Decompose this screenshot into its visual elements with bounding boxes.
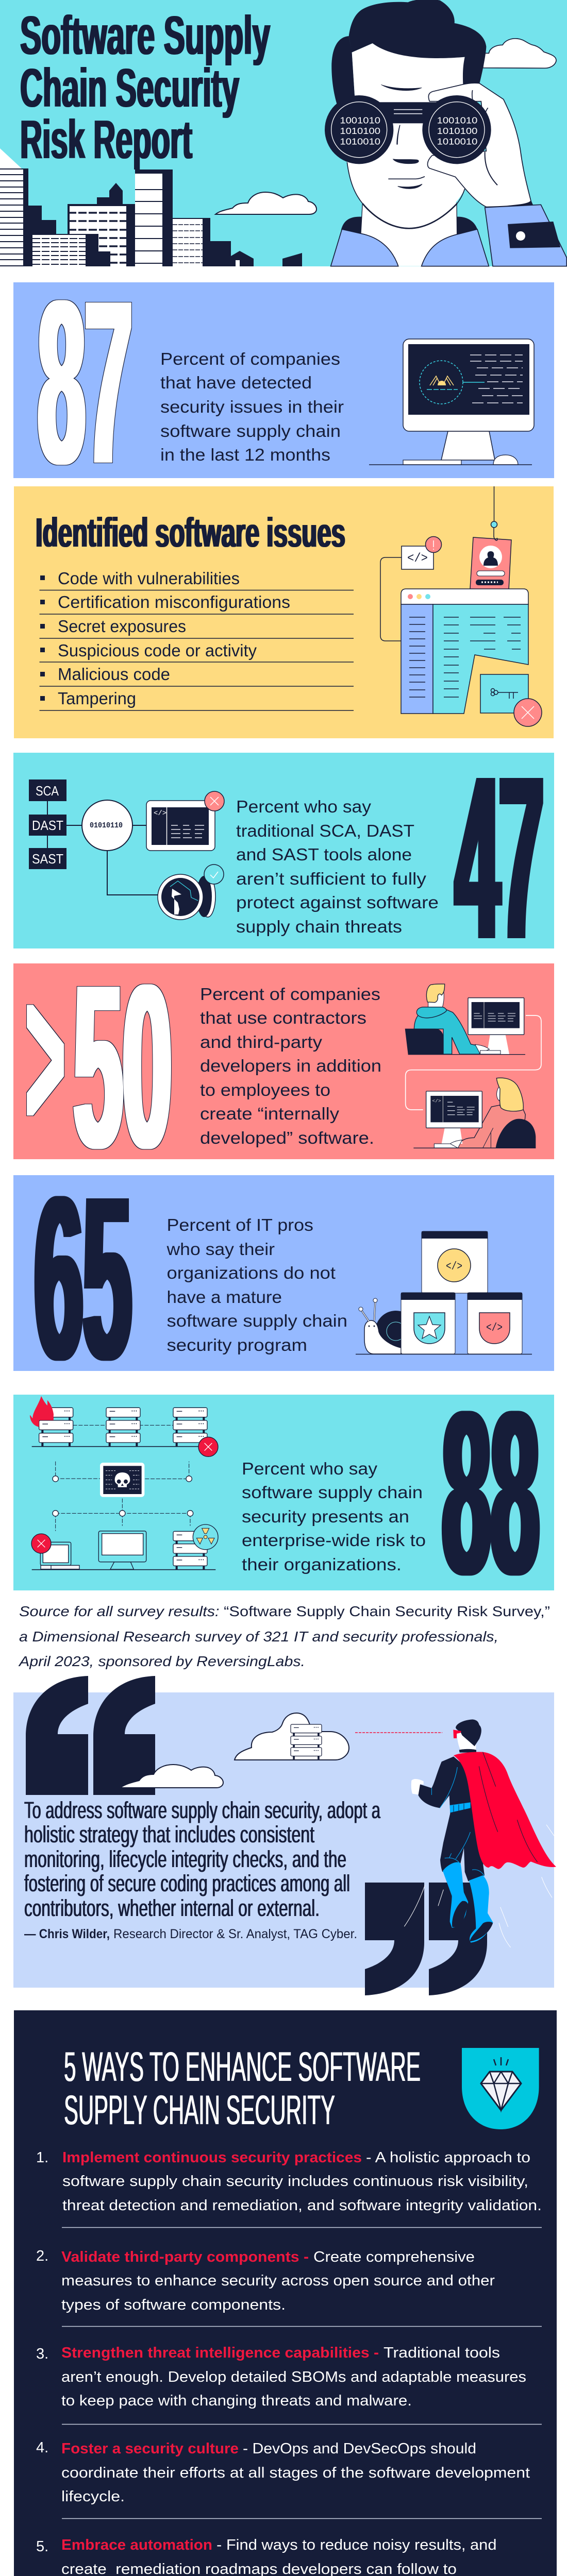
stat text: have a mature bbox=[167, 1287, 282, 1307]
network threat diagram bbox=[30, 1396, 218, 1570]
issues list: Tampering bbox=[58, 689, 136, 708]
stat text: software supply chain bbox=[160, 421, 341, 440]
man looking through binoculars: 1001010 bbox=[437, 115, 477, 125]
item 4: - DevOps and DevSecOps should bbox=[243, 2441, 476, 2457]
left box with star shield bbox=[401, 1293, 455, 1354]
source note: a Dimensional Research survey of 321 IT and security professionals, bbox=[19, 1629, 498, 1645]
stat text: software supply chain bbox=[242, 1483, 423, 1502]
attribution: — Chris Wilder, bbox=[24, 1927, 110, 1941]
quote text: contributors, whether internal or external. bbox=[24, 1895, 320, 1921]
tools diagram bbox=[29, 779, 224, 920]
stat text: supply chain threats bbox=[236, 917, 402, 936]
code window with X bbox=[146, 791, 224, 851]
item 3: aren’t enough. Develop detailed SBOMs and adaptable measures bbox=[61, 2369, 526, 2385]
title: Software Supply bbox=[20, 5, 270, 66]
stat text bbox=[242, 1459, 426, 1574]
stat text: and third-party bbox=[200, 1032, 323, 1052]
server racks bbox=[39, 1408, 207, 1446]
item 1: Implement continuous security practices bbox=[62, 2149, 362, 2166]
laptop with X bbox=[31, 1534, 79, 1569]
item 1: - A holistic approach to bbox=[366, 2149, 530, 2166]
man looking through binoculars: 1001010 bbox=[340, 115, 380, 125]
stat panel over 50 percent: 50 bbox=[74, 936, 172, 1196]
man looking through binoculars: 1010100 bbox=[437, 126, 477, 136]
heading bbox=[64, 2044, 421, 2133]
man looking through binoculars: 1010100 bbox=[340, 126, 380, 136]
stat text: Percent who say bbox=[242, 1459, 378, 1478]
label DAST: DAST bbox=[32, 818, 63, 833]
stat panel 65 percent: 65 bbox=[35, 1148, 131, 1408]
stat text: their organizations. bbox=[242, 1555, 402, 1574]
label SCA bbox=[29, 779, 66, 801]
stat panel 47 percent bbox=[13, 727, 554, 988]
skull screen bbox=[100, 1463, 144, 1497]
hacker coin with check bbox=[158, 865, 224, 920]
source note: Source for all survey results: “Software Supply Chain Security Risk Survey,” bbox=[19, 1603, 550, 1619]
big number >50: > bbox=[27, 942, 63, 1172]
stat text bbox=[166, 1215, 347, 1354]
item 4: 4. bbox=[36, 2439, 48, 2456]
stat text: Percent of companies bbox=[200, 985, 380, 1004]
stat text: software supply chain bbox=[167, 1311, 347, 1330]
item 5: Embrace automation bbox=[61, 2537, 212, 2553]
stat text: who say their bbox=[166, 1240, 275, 1259]
source note bbox=[18, 1603, 550, 1669]
item 1: 1. bbox=[36, 2149, 48, 2166]
right box with code shield bbox=[468, 1293, 522, 1354]
item 3 bbox=[36, 2345, 526, 2409]
item 2: types of software components. bbox=[61, 2297, 286, 2313]
heading: Identified software issues bbox=[36, 510, 345, 555]
label SCA: SCA bbox=[36, 783, 59, 799]
item 3: Strengthen threat intelligence capabilities - bbox=[61, 2345, 379, 2361]
binary node: 01010110 bbox=[90, 821, 123, 830]
stat text: security program bbox=[167, 1335, 307, 1354]
issues list: Suspicious code or activity bbox=[58, 641, 257, 660]
city skyline bbox=[0, 148, 302, 266]
item 4: lifecycle. bbox=[61, 2488, 125, 2505]
stat text: security presents an bbox=[242, 1507, 409, 1526]
stat text bbox=[200, 985, 381, 1147]
illustration: app window, phishing hook and key: </> bbox=[407, 552, 428, 566]
superhero with cape bbox=[404, 1719, 556, 1947]
small cloud bbox=[120, 1765, 223, 1788]
quote text bbox=[24, 1797, 381, 1921]
stat text: and SAST tools alone bbox=[236, 845, 412, 864]
issues list: Malicious code bbox=[58, 665, 170, 684]
stat text: organizations do not bbox=[167, 1263, 336, 1282]
top box with code badge bbox=[422, 1231, 488, 1293]
stat text: create “internally bbox=[200, 1104, 340, 1123]
issues list: Code with vulnerabilities bbox=[58, 569, 240, 588]
opening quotation marks bbox=[26, 1676, 155, 1795]
illustration: two developers at monitors: </> bbox=[432, 1098, 441, 1104]
item 3: to keep pace with changing threats and malware. bbox=[61, 2393, 412, 2409]
source note: April 2023, sponsored by ReversingLabs. bbox=[18, 1653, 305, 1669]
desktop monitor bbox=[98, 1531, 146, 1569]
item 5: 5. bbox=[36, 2538, 48, 2555]
stat text: Percent who say bbox=[236, 797, 372, 816]
illustration: snail and security boxes bbox=[356, 1231, 532, 1354]
item 5 bbox=[36, 2537, 497, 2576]
red X badge bbox=[198, 1437, 218, 1456]
title: Chain Security bbox=[20, 58, 239, 118]
man looking through binoculars bbox=[325, 0, 566, 266]
item 3: Traditional tools bbox=[383, 2345, 500, 2361]
stat text: security issues in their bbox=[160, 397, 344, 416]
cloud with server bbox=[235, 1713, 349, 1760]
item 1: software supply chain security includes continuous risk visibility, bbox=[62, 2173, 528, 2190]
flame bbox=[30, 1396, 54, 1427]
quote text: holistic strategy that includes consistent bbox=[24, 1821, 314, 1848]
stat text: protect against software bbox=[236, 893, 439, 912]
item 2 bbox=[36, 2248, 495, 2313]
stat panel 87 percent bbox=[13, 252, 554, 512]
icon: monitor with bug bbox=[369, 339, 534, 465]
quote text: To address software supply chain security, adopt a bbox=[24, 1797, 381, 1823]
label DAST bbox=[29, 815, 66, 836]
illustration: two developers at monitors bbox=[405, 984, 541, 1148]
radioactive server bbox=[173, 1524, 218, 1569]
panel: identified software issues bbox=[14, 486, 554, 738]
stat text: that use contractors bbox=[200, 1008, 366, 1027]
stat text: Percent of IT pros bbox=[167, 1215, 313, 1234]
item 5: - Find ways to reduce noisy results, and bbox=[216, 2537, 497, 2553]
item 4: coordinate their efforts at all stages of the software development bbox=[61, 2465, 530, 2481]
stat panel 87 percent: 87 bbox=[38, 252, 132, 512]
attribution: Research Director & Sr. Analyst, TAG Cyber. bbox=[113, 1927, 357, 1941]
stat text: Percent of companies bbox=[160, 349, 340, 368]
closing quotation marks bbox=[365, 1883, 487, 1995]
issues list: Secret exposures bbox=[58, 617, 186, 636]
right box with code shield: </> bbox=[486, 1321, 503, 1334]
panel: expert quote bbox=[13, 1676, 556, 1995]
quote text: monitoring, lifecycle integrity checks, and the bbox=[24, 1846, 346, 1872]
snail bbox=[359, 1298, 416, 1354]
illustration: app window, phishing hook and key bbox=[380, 486, 542, 726]
title: Risk Report bbox=[20, 109, 192, 170]
item 2: Create comprehensive bbox=[313, 2249, 475, 2265]
panel: 5 ways bbox=[14, 2010, 557, 2576]
label SAST bbox=[29, 848, 66, 869]
stat text: developers in addition bbox=[200, 1056, 381, 1075]
stat text: to employees to bbox=[200, 1080, 330, 1099]
cloud bbox=[215, 192, 316, 214]
man looking through binoculars: 1010010 bbox=[437, 137, 477, 147]
laser dashed line bbox=[355, 1732, 442, 1733]
stat panel over 50 percent bbox=[13, 936, 554, 1196]
junction nodes bbox=[53, 1476, 193, 1516]
issues list bbox=[39, 569, 354, 710]
stat text: in the last 12 months bbox=[160, 445, 330, 464]
title bbox=[20, 5, 270, 170]
stat text: enterprise-wide risk to bbox=[242, 1531, 426, 1550]
item 1: threat detection and remediation, and software integrity validation. bbox=[62, 2197, 542, 2214]
label SAST: SAST bbox=[32, 851, 63, 867]
stat text: developed” software. bbox=[200, 1128, 374, 1147]
item 2: 2. bbox=[36, 2248, 48, 2264]
icon: diamond badge bbox=[462, 2048, 539, 2129]
stat text bbox=[236, 797, 439, 936]
item 4: Foster a security culture bbox=[61, 2441, 239, 2457]
stat text: that have detected bbox=[160, 373, 312, 392]
item 1 bbox=[36, 2149, 542, 2214]
stat text: aren’t sufficient to fully bbox=[236, 869, 427, 888]
stat text: traditional SCA, DAST bbox=[236, 821, 414, 840]
code window with X: </> bbox=[154, 809, 166, 818]
man looking through binoculars: 1010010 bbox=[340, 137, 380, 147]
stat panel 65 percent bbox=[13, 1148, 554, 1408]
item 2: measures to enhance security across open source and other bbox=[61, 2273, 495, 2289]
item 2: Validate third-party components - bbox=[61, 2249, 309, 2265]
hero panel bbox=[0, 0, 567, 266]
issues list: Certification misconfigurations bbox=[58, 592, 290, 612]
binary node bbox=[82, 800, 132, 851]
quote text: fostering of secure coding practices among all bbox=[24, 1870, 350, 1896]
stat panel 88 percent bbox=[13, 1363, 554, 1623]
top box with code badge: </> bbox=[446, 1260, 462, 1273]
item 3: 3. bbox=[36, 2346, 48, 2362]
stat text bbox=[160, 349, 344, 464]
item 4 bbox=[36, 2439, 530, 2505]
